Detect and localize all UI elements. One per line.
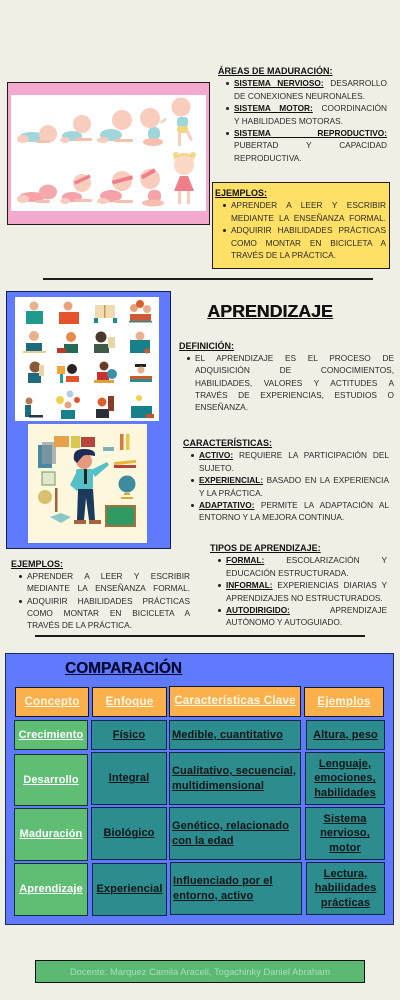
cell: experiential	[92, 863, 167, 916]
row label: maturation	[14, 808, 88, 861]
heading: examples: EJEMPLOS:	[215, 188, 267, 198]
cell: language emotions skills: habilidades	[314, 787, 376, 799]
list: types of learning	[218, 555, 387, 627]
heading: learning examples: EJEMPLOS:	[11, 558, 63, 568]
cell: reading practical skills: Lectura,	[324, 868, 367, 880]
title: aprendizaje: APRENDIZAJE	[207, 301, 333, 321]
list: learning examples: ADQUIRIR HABILIDADES PRÁCTICAS	[27, 596, 190, 606]
heading: comparison: COMPARACIÓN	[65, 660, 182, 677]
list: learning examples: COMO MONTAR EN BICICLETA A	[27, 608, 190, 618]
list: examples: MEDIANTE LA ENSEÑANZA FORMAL.	[231, 213, 386, 223]
panel: comparison	[5, 653, 394, 924]
table header: examples	[304, 687, 384, 717]
illustration: grid of people studying	[15, 297, 159, 421]
list: definition text	[187, 353, 394, 412]
table header: approach: Enfoque	[106, 695, 153, 708]
panel: baby development image	[7, 82, 210, 225]
table: comparison of concepts	[14, 686, 385, 916]
text block: definition	[179, 340, 394, 412]
cell: nervous system motor	[305, 807, 385, 860]
cell: nervous system motor: motor	[329, 842, 361, 854]
illustration: babies growing in stages	[11, 95, 206, 211]
footer: teachers	[35, 960, 365, 983]
list: examples: ADQUIRIR HABILIDADES PRÁCTICAS	[231, 225, 386, 235]
cell: qualitative: multidimensional	[172, 780, 264, 792]
cell: reading practical skills: prácticas	[321, 897, 370, 909]
cell: biological	[91, 807, 167, 860]
list: examples: COMO MONTAR EN BICICLETA A	[231, 238, 386, 248]
list: types of learning: AUTODIRIGIDO: APRENDIZAJE	[226, 605, 387, 615]
cell: experiential: Experiencial	[96, 883, 162, 895]
list: characteristics: ACTIVO: REQUIERE LA PARTICIPACIÓN DEL	[199, 450, 389, 460]
cell: qualitative: Cualitativo, secuencial,	[172, 765, 296, 777]
cell: measurable: Medible, cuantitativo	[172, 729, 283, 741]
row label: growth	[14, 720, 88, 750]
row label: learning: Aprendizaje	[19, 883, 83, 895]
list: types of learning: APRENDIZAJES NO ESTRUCTURADOS.	[226, 593, 383, 603]
list: characteristics	[191, 450, 389, 522]
list: maturation areas: DE CONEXIONES NEURONALES.	[234, 91, 365, 101]
cell: language emotions skills: Lenguaje,	[319, 758, 371, 770]
cell: integral	[91, 752, 167, 805]
list: examples: APRENDER A LEER Y ESCRIBIR	[231, 200, 386, 210]
list: characteristics: EXPERIENCIAL: BASADO EN LA EXPERIENCIA	[199, 475, 389, 485]
list: maturation areas: REPRODUCTIVA.	[234, 153, 302, 163]
footer: teachers: Docente: Marquez Camila Araceli, Togachinky Daniel Abraham	[70, 966, 330, 977]
heading: types of learning: TIPOS DE APRENDIZAJE:	[210, 543, 321, 553]
heading: areas of maturation: ÁREAS DE MADURACIÓN:	[218, 66, 332, 76]
cell: language emotions skills: emociones,	[314, 772, 376, 784]
cell: reading practical skills: habilidades	[315, 882, 376, 894]
table header: examples: Ejemplos	[317, 695, 371, 708]
table header: approach	[92, 687, 167, 717]
list: types of learning: EDUCACIÓN ESTRUCTURADA.	[226, 568, 349, 578]
cell: physical	[91, 720, 167, 750]
list: characteristics: ADAPTATIVO: PERMITE LA ADAPTACIÓN AL	[199, 500, 389, 510]
list: maturation areas: SISTEMA NERVIOSO: DESARROLLO	[234, 78, 387, 88]
cell: influenced by environment: entorno, activo	[173, 890, 253, 902]
cell: influenced by environment	[170, 862, 302, 915]
row label: development: Desarrollo	[23, 774, 79, 786]
cell: height and weight	[306, 720, 385, 750]
row label: maturation: Maduración	[20, 828, 82, 840]
list: definition text: EL APRENDIZAJE ES EL PROCESO DE	[195, 353, 394, 363]
list: types of learning: AUTÓNOMO Y AUTOGUIADO.	[226, 617, 342, 627]
cell: integral: Integral	[109, 772, 149, 784]
list: definition text: ADQUISICIÓN DE CONOCIMIENTOS,	[195, 365, 394, 375]
heading: definition: DEFINICIÓN:	[179, 340, 234, 350]
list: definition text: ENSEÑANZA.	[195, 402, 248, 412]
list: characteristics: ENTORNO Y LA MEJORA CONTINUA.	[199, 512, 344, 522]
list: examples	[223, 200, 386, 260]
list: learning examples: APRENDER A LEER Y ESCRIBIR	[27, 571, 190, 581]
table header: key characteristics	[169, 686, 301, 717]
text block: learning examples	[11, 558, 190, 630]
text block: types of learning	[210, 543, 387, 627]
cell: language emotions skills	[305, 752, 385, 805]
heading: characteristics: CARACTERÍSTICAS:	[183, 438, 272, 448]
list: maturation areas: SISTEMA REPRODUCTIVO:	[234, 128, 387, 138]
row label: learning	[14, 863, 88, 916]
text block: areas of maturation	[218, 66, 387, 163]
cell: genetic: con la edad	[172, 834, 234, 846]
cell: influenced by environment: Influenciado por el	[173, 875, 273, 887]
list: characteristics: SUJETO.	[199, 463, 234, 473]
cell: genetic	[169, 807, 301, 860]
table header: concept: Concepto	[24, 695, 80, 708]
cell: reading practical skills	[306, 862, 385, 915]
table header: key characteristics: Características Clave	[174, 694, 296, 707]
list: definition text: HABILIDADES, VALORES Y ACTITUDES A	[195, 378, 394, 388]
panel: learning images	[6, 291, 171, 549]
illustration: teacher with school items	[28, 424, 147, 543]
list: types of learning: FORMAL: ESCOLARIZACIÓN Y	[226, 555, 387, 565]
panel: examples on yellow	[212, 182, 390, 269]
list: learning examples	[19, 571, 190, 630]
list: maturation areas: Y HABILIDADES MOTORAS.	[234, 116, 343, 126]
row label: growth: Crecimiento	[19, 729, 83, 741]
list: learning examples: MEDIANTE LA ENSEÑANZA FORMAL.	[27, 583, 190, 593]
cell: qualitative	[169, 752, 301, 805]
table header: concept	[15, 687, 89, 717]
cell: biological: Biológico	[103, 827, 154, 839]
list: maturation areas	[226, 78, 387, 163]
list: maturation areas: SISTEMA MOTOR: COORDINACIÓN	[234, 103, 387, 113]
cell: nervous system motor: nervioso,	[320, 827, 370, 839]
cell: nervous system motor: Sistema	[324, 813, 366, 825]
cell: genetic: Genético, relacionado	[172, 820, 289, 832]
list: definition text: TRAVÉS DE EXPERIENCIAS, ESTUDIOS O	[195, 390, 394, 400]
list: maturation areas: PUBERTAD Y CAPACIDAD	[234, 140, 387, 150]
list: examples: TRAVÉS DE LA PRÁCTICA.	[231, 250, 336, 260]
cell: measurable	[169, 720, 301, 750]
cell: height and weight: Altura, peso	[313, 729, 378, 741]
row label: development	[14, 754, 88, 806]
text block: characteristics	[183, 438, 389, 522]
cell: physical: Físico	[113, 729, 145, 741]
list: types of learning: INFORMAL: EXPERIENCIAS DIARIAS Y	[226, 580, 387, 590]
list: learning examples: TRAVÉS DE LA PRÁCTICA.	[27, 620, 132, 630]
list: characteristics: Y LA PRÁCTICA.	[199, 488, 263, 498]
